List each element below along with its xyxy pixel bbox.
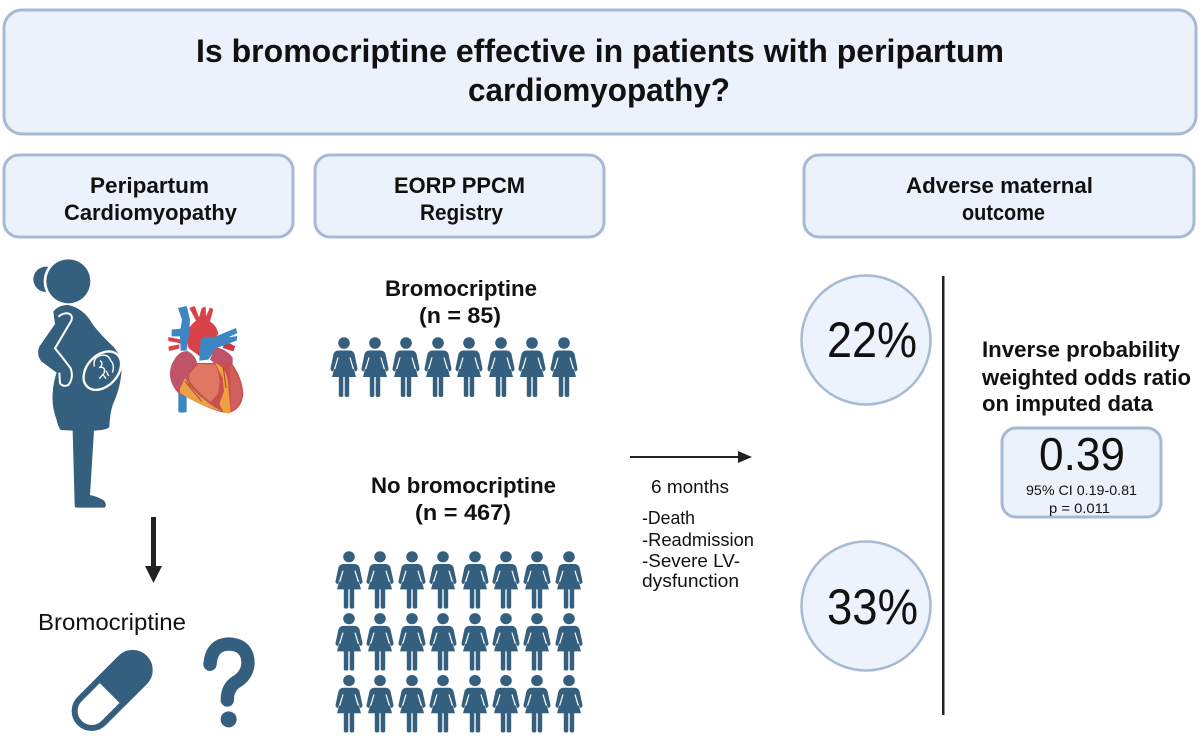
group label: No bromocriptine n = 467: No bromocriptine bbox=[371, 473, 556, 498]
panel heading: Adverse maternal outcome: outcome bbox=[962, 200, 1045, 225]
title text bbox=[196, 33, 1004, 108]
heading: odds ratio method: weighted odds ratio bbox=[981, 365, 1191, 390]
heading: odds ratio method: on imputed data bbox=[982, 391, 1154, 416]
panel heading: Peripartum Cardiomyopathy: Peripartum bbox=[90, 173, 209, 198]
text: outcome components: -Severe LV- bbox=[642, 551, 740, 571]
panel heading: Peripartum Cardiomyopathy: Cardiomyopathy bbox=[64, 200, 238, 225]
panel heading: EORP PPCM Registry: EORP PPCM bbox=[394, 173, 525, 198]
title text: cardiomyopathy? bbox=[468, 72, 730, 108]
icon: anatomical heart bbox=[168, 306, 243, 413]
text: outcome components: dysfunction bbox=[642, 571, 739, 591]
stat circle: 33%: 33% bbox=[827, 579, 918, 635]
panel heading: Adverse maternal outcome bbox=[804, 155, 1194, 237]
group label: Bromocriptine n = 85: Bromocriptine bbox=[385, 276, 537, 301]
panel heading: Peripartum Cardiomyopathy bbox=[4, 155, 293, 237]
arrow: down to bromocriptine bbox=[145, 517, 162, 583]
group label: No bromocriptine n = 467: (n = 467) bbox=[415, 500, 511, 525]
callout: odds ratio result: 95% CI 0.19-0.81 bbox=[1026, 482, 1137, 498]
icon: pregnant woman bbox=[33, 257, 129, 508]
panel heading: EORP PPCM Registry bbox=[315, 155, 604, 237]
stat circle: 22% bbox=[802, 276, 930, 404]
panel heading: Adverse maternal outcome: Adverse maternal bbox=[906, 173, 1093, 198]
stat circle: 22%: 22% bbox=[827, 312, 917, 368]
title panel bbox=[4, 10, 1196, 134]
icon: question mark bbox=[210, 644, 248, 727]
arrow: follow-up bbox=[630, 451, 752, 463]
panel heading: EORP PPCM Registry: Registry bbox=[420, 200, 504, 225]
group label: No bromocriptine n = 467 bbox=[371, 473, 556, 525]
text: outcome components: -Death bbox=[642, 508, 695, 528]
callout: odds ratio result bbox=[1002, 428, 1161, 517]
heading: odds ratio method: Inverse probability bbox=[982, 337, 1181, 362]
pictogram: bromocriptine group bbox=[330, 337, 578, 397]
title text: Is bromocriptine effective in patients with peripartum bbox=[196, 33, 1004, 69]
group label: Bromocriptine n = 85 bbox=[385, 276, 537, 328]
stat circle: 33% bbox=[802, 542, 930, 670]
icon: capsule pill bbox=[65, 642, 161, 737]
heading: odds ratio method bbox=[981, 337, 1191, 416]
group label: Bromocriptine n = 85: (n = 85) bbox=[419, 303, 501, 328]
divider line bbox=[942, 276, 944, 715]
pictogram: no bromocriptine group bbox=[335, 551, 583, 732]
label: Bromocriptine: Bromocriptine bbox=[38, 609, 186, 635]
callout: odds ratio result: 0.39 bbox=[1039, 428, 1125, 480]
text: outcome components bbox=[642, 508, 754, 591]
text: outcome components: -Readmission bbox=[642, 530, 754, 550]
callout: odds ratio result: p = 0.011 bbox=[1049, 500, 1110, 516]
text: follow-up duration: 6 months bbox=[651, 477, 729, 497]
